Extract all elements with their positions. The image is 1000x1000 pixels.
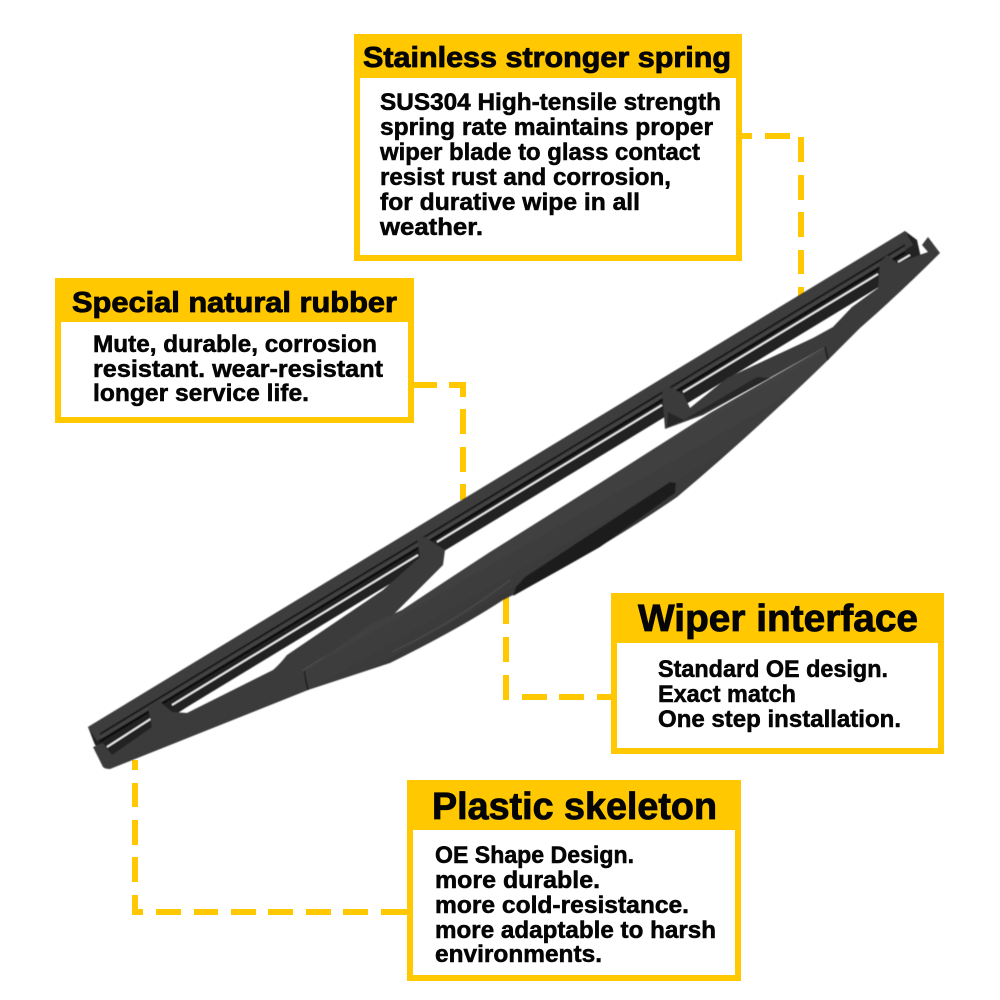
panel: plastic skeleton — [407, 780, 741, 981]
blade rail — [88, 231, 922, 756]
text block: skeleton description: environments. — [435, 941, 602, 968]
text block: spring description: spring rate maintains proper — [380, 114, 713, 141]
text block: rubber description: longer service life. — [93, 380, 309, 407]
text block: spring description — [379, 89, 721, 241]
panel: stainless stronger spring — [354, 34, 742, 261]
connector: interface callout to blade — [503, 596, 611, 700]
text block: skeleton description — [435, 842, 716, 968]
text block: spring description: wiper blade to glass contact — [379, 139, 700, 166]
text block: skeleton description: more durable. — [435, 867, 600, 894]
right arm — [662, 237, 940, 429]
panel: wiper interface — [611, 593, 944, 754]
left arm — [93, 537, 445, 769]
wiper blade illustration — [88, 231, 940, 769]
text block: spring description: weather. — [379, 214, 483, 241]
text block: skeleton description: more adaptable to harsh — [435, 917, 716, 944]
heading: special natural rubber: Special natural rubber — [72, 287, 397, 319]
connector: skeleton callout to blade — [132, 760, 407, 915]
heading: wiper interface: Wiper interface — [638, 598, 918, 640]
text block: spring description: for durative wipe in all — [380, 189, 640, 216]
interface recess — [513, 482, 676, 596]
text block: rubber description: Mute, durable, corrosion — [93, 331, 377, 358]
text block: interface description: One step installation. — [658, 706, 901, 733]
connector: rubber callout to blade — [414, 382, 466, 500]
text block: spring description: resist rust and corrosion, — [380, 164, 671, 191]
text block: interface description: Exact match — [658, 681, 796, 708]
text block: spring description: SUS304 High-tensile strength — [380, 89, 721, 116]
text block: rubber description — [93, 331, 383, 407]
panel: special natural rubber — [55, 278, 414, 423]
text block: interface description — [658, 656, 901, 733]
text block: skeleton description: more cold-resistance. — [435, 892, 689, 919]
centre body — [303, 347, 828, 690]
text block: interface description: Standard OE design. — [658, 656, 888, 683]
heading: plastic skeleton: Plastic skeleton — [432, 786, 717, 828]
chrome spring strip — [107, 255, 910, 747]
connector: spring callout to blade — [742, 133, 804, 297]
text block: skeleton description: OE Shape Design. — [435, 842, 634, 869]
heading: stainless stronger spring: Stainless stronger spring — [363, 42, 731, 74]
text block: rubber description: resistant. wear-resistant — [93, 356, 383, 383]
